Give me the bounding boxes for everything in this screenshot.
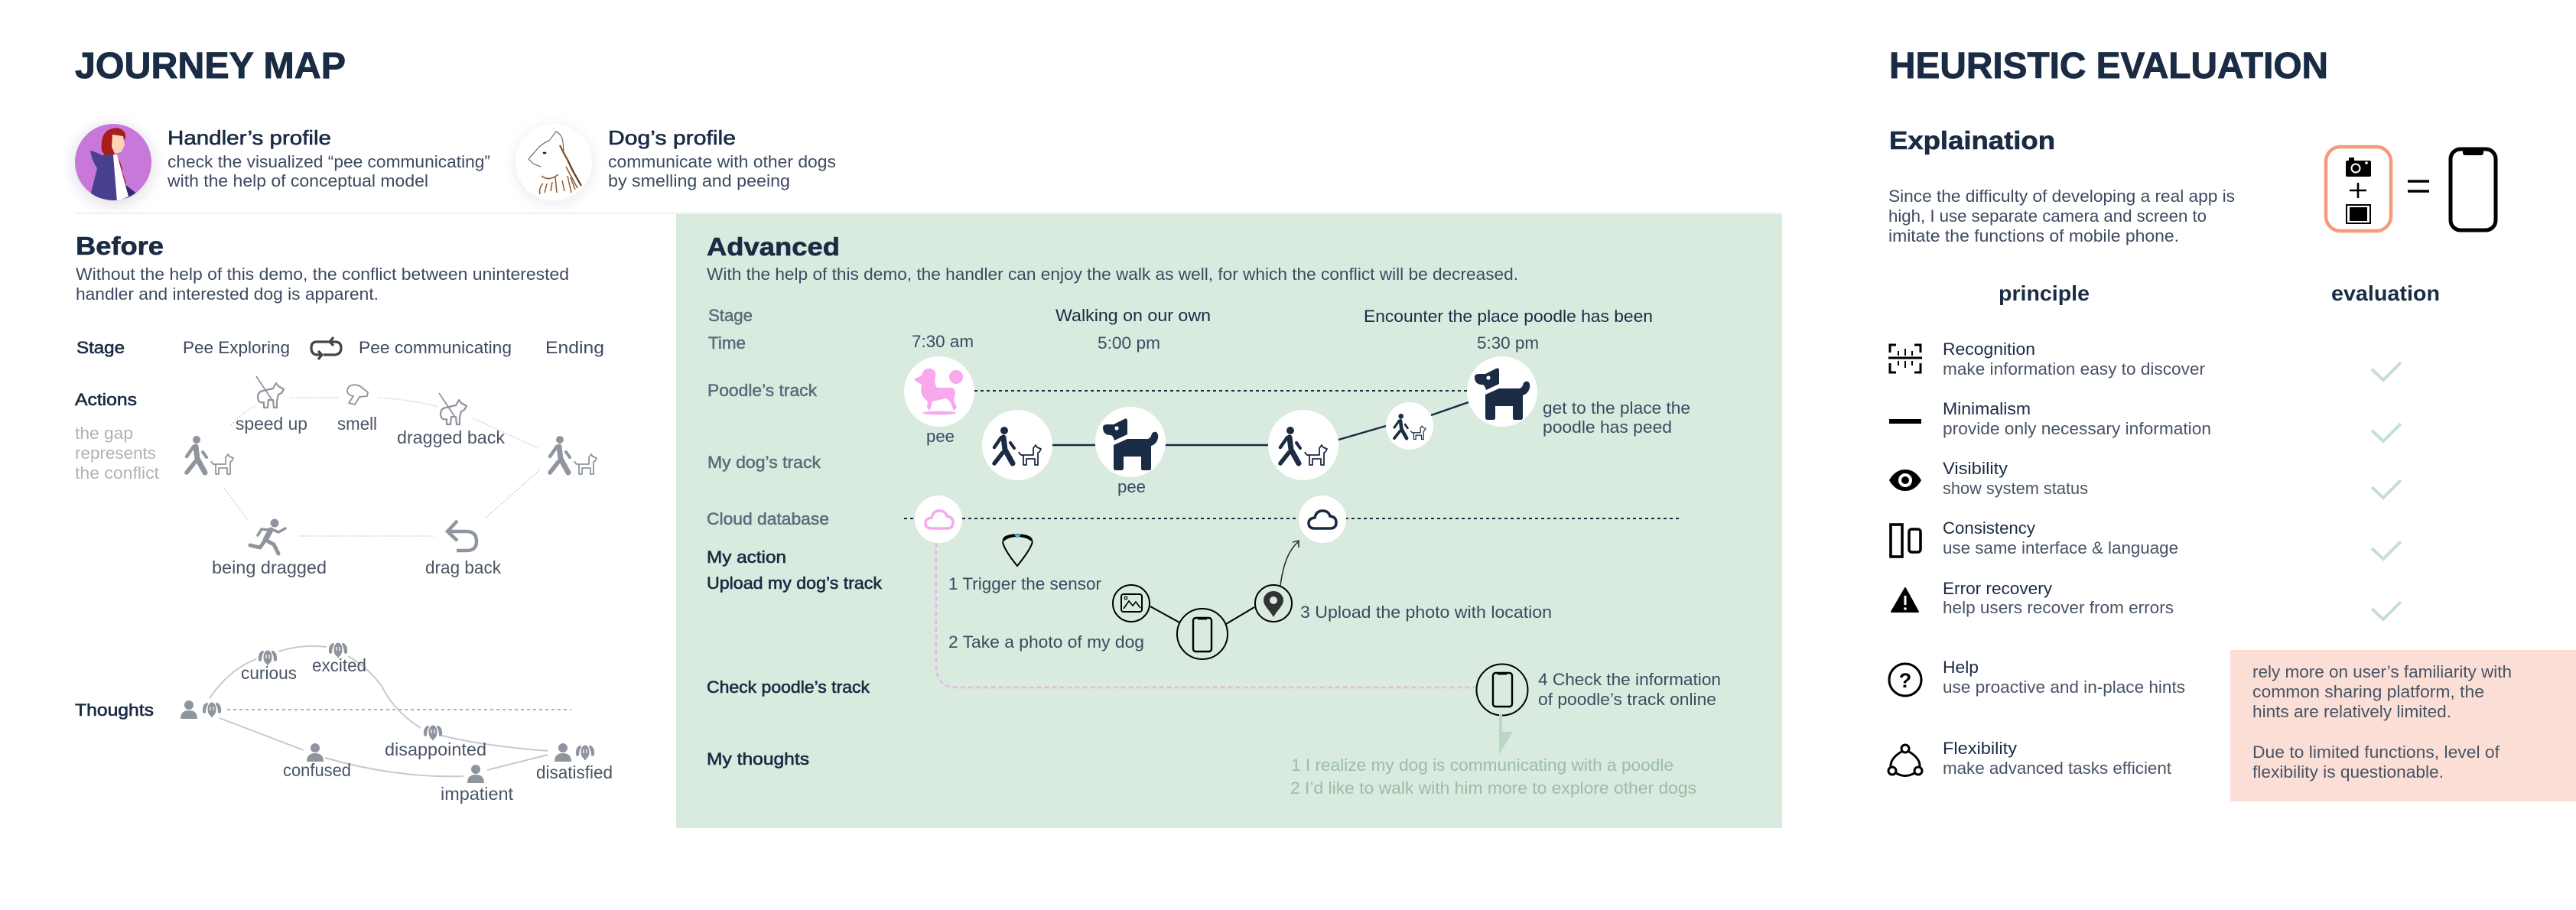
label: speed up: speed up <box>236 414 307 434</box>
icon: consistency <box>1891 525 1921 557</box>
row: recognition <box>1888 340 2401 380</box>
title: journey map: JOURNEY MAP <box>75 46 346 86</box>
text: explanation: Since the difficulty of developing a real app is <box>1888 187 2235 206</box>
icon: handler and dog start <box>187 436 233 474</box>
row: minimalism <box>1889 399 2401 441</box>
panel: advanced <box>676 214 1782 828</box>
node: walking small <box>1386 402 1433 450</box>
text: before description <box>76 265 569 304</box>
text: get to the place <box>1543 398 1690 437</box>
text: minimalism <box>1943 399 2211 438</box>
avatar: handler illustration <box>75 124 151 202</box>
icon: flexibility <box>1888 745 1922 775</box>
node: my dog pee <box>1095 407 1166 477</box>
step 4 text: of poodle’s track online <box>1538 690 1716 709</box>
arrow: to thoughts <box>1499 714 1513 754</box>
row label: time: Time <box>708 333 746 353</box>
text: help note: hints are relatively limited. <box>2252 702 2451 721</box>
label: disappointed: disappointed <box>385 739 486 759</box>
diagram: camera plus screen equals phone <box>2326 147 2496 231</box>
icon: drag back arrow <box>447 521 476 551</box>
note: the gap represents the conflict: the gap <box>75 424 133 443</box>
text: handler description: with the help of conceptual model <box>167 171 428 190</box>
label: excited: excited <box>312 655 366 675</box>
column heading: principle: principle <box>1999 281 2090 305</box>
icon: help: ? <box>1899 669 1911 692</box>
icon: speed up dog <box>256 376 284 408</box>
row label: my dog's track: My dog’s track <box>707 453 821 472</box>
text: flexibility: make advanced tasks efficient <box>1943 759 2171 778</box>
text: dog description: by smelling and peeing <box>608 171 790 190</box>
node: pink cloud <box>915 496 962 543</box>
icon: minimalism <box>1889 419 1921 424</box>
heading: before: Before <box>76 232 164 260</box>
text: error recovery: help users recover from errors <box>1943 598 2174 617</box>
panel background <box>676 214 1782 828</box>
heading: handler's profile: Handler’s profile <box>168 126 331 149</box>
diagram: action loop connectors <box>223 398 539 536</box>
stage: encounter: Encounter the place poodle has been <box>1364 307 1653 326</box>
row: error recovery <box>1891 579 2401 619</box>
text: dog description: communicate with other dogs <box>608 152 836 171</box>
label: pee under my dog: pee <box>1117 477 1146 496</box>
text: consistency: use same interface & language <box>1943 538 2178 557</box>
arrow: upload to cloud <box>1280 541 1299 586</box>
step 4 text <box>1538 670 1721 709</box>
heading: explaination: Explaination <box>1889 126 2055 154</box>
icon: visibility <box>1889 470 1921 491</box>
text: minimalism: Minimalism <box>1943 399 2031 418</box>
icon: dog neutral <box>203 702 221 717</box>
profile: handler <box>75 124 490 202</box>
icon: equals <box>2408 181 2429 191</box>
heading: dog's profile: Dog’s profile <box>608 126 736 149</box>
icon: smell <box>347 385 368 405</box>
time: 5:30 pm: 5:30 pm <box>1477 333 1539 353</box>
icon: dragged back dog <box>439 393 467 424</box>
stage row: Stage <box>76 338 125 357</box>
text: handler description <box>167 152 490 190</box>
my thoughts text <box>1290 756 1696 798</box>
text: flexibility note: flexibility is questionable. <box>2252 762 2444 782</box>
note: the gap represents the conflict: represents <box>75 444 156 463</box>
text: help: Help <box>1943 658 1979 677</box>
check mark <box>2372 424 2401 441</box>
step 1 text: 1 Trigger the sensor <box>948 574 1101 593</box>
row label: my thoughts: My thoughts <box>707 749 809 769</box>
text: help <box>1943 658 2185 697</box>
panel: before <box>75 232 613 804</box>
text: get to the place: get to the place the <box>1543 398 1690 418</box>
node: navy cloud <box>1299 496 1346 543</box>
text: recognition: make information easy to discover <box>1943 359 2205 379</box>
text: error recovery <box>1943 579 2174 617</box>
icon: phone <box>2451 149 2496 230</box>
label: dragged back: dragged back <box>397 427 505 447</box>
stage row <box>76 337 604 359</box>
icon: excited dog <box>329 642 347 658</box>
stage: walking on our own: Walking on our own <box>1055 306 1211 325</box>
text: help: use proactive and in-place hints <box>1943 678 2185 697</box>
icon: disappointed dog <box>424 725 442 740</box>
heading: advanced: Advanced <box>707 232 840 261</box>
title: heuristic evaluation: HEURISTIC EVALUATION <box>1889 46 2328 86</box>
row label: check poodle's track: Check poodle’s track <box>707 678 870 697</box>
icon: handler and dog end <box>550 436 597 474</box>
label: impatient: impatient <box>441 784 514 804</box>
icon: curious dog <box>259 650 277 665</box>
row: flexibility <box>1888 739 2171 778</box>
text: flexibility <box>1943 739 2171 778</box>
column heading: evaluation: evaluation <box>2331 281 2440 305</box>
step 3 text: 3 Upload the photo with location <box>1300 603 1552 622</box>
text: help note <box>2252 662 2512 721</box>
text: explanation: imitate the functions of mobile phone. <box>1888 226 2179 245</box>
row label: cloud database: Cloud database <box>707 509 829 528</box>
profile: dog <box>516 124 836 200</box>
row label: my action: My action <box>707 548 786 567</box>
my thoughts text: 1 I realize my dog is communicating with a poodle <box>1291 756 1673 775</box>
step links <box>1150 606 1254 624</box>
text: help note: common sharing platform, the <box>2252 682 2484 701</box>
text: explanation <box>1888 187 2235 245</box>
text: recognition <box>1943 340 2205 379</box>
node: location pin <box>1255 585 1292 622</box>
text: recognition: Recognition <box>1943 340 2035 359</box>
check mark <box>2372 480 2401 498</box>
text: consistency <box>1943 518 2178 557</box>
check mark <box>2372 362 2401 380</box>
node: phone <box>1177 609 1228 659</box>
label: drag back: drag back <box>425 557 501 577</box>
text: handler description: check the visualized “pee communicating” <box>168 152 490 171</box>
label: curious: curious <box>241 663 297 683</box>
node: photo <box>1113 585 1150 622</box>
text: before description: Without the help of this demo, the conflict between uninterested <box>76 265 569 284</box>
step 4 text: 4 Check the information <box>1538 670 1721 689</box>
text: flexibility note: Due to limited functions, level of <box>2252 743 2500 762</box>
note: the gap represents the conflict <box>75 424 159 483</box>
node: check phone <box>1476 664 1528 716</box>
label: confused: confused <box>283 760 351 780</box>
node: encounter dog <box>1467 356 1537 427</box>
avatar: dog sketch <box>516 124 592 200</box>
text: explanation: high, I use separate camera and screen to <box>1888 206 2207 226</box>
row label: upload my dog's track: Upload my dog’s track <box>707 574 883 593</box>
text: visibility: show system status <box>1943 479 2088 498</box>
text: help note: rely more on user’s familiarity with <box>2252 662 2512 681</box>
text: error recovery: Error recovery <box>1943 579 2052 598</box>
text: advanced description: With the help of this demo, the handler can enjoy the walk as well, for which the conflict will be decreased. <box>707 265 1518 284</box>
icon: sensor <box>1003 534 1033 566</box>
row: visibility <box>1889 459 2401 498</box>
icon: error recovery <box>1891 588 1918 612</box>
icon: person neutral <box>181 700 197 719</box>
text: visibility: Visibility <box>1943 459 2008 478</box>
label: thoughts: Thoughts <box>75 700 154 720</box>
stage row: Pee communicating <box>359 338 512 357</box>
note: the gap represents the conflict: the conflict <box>75 463 159 483</box>
time: 7:30 am: 7:30 am <box>912 332 974 351</box>
label: pee under poodle: pee <box>926 427 955 446</box>
label: actions: Actions <box>75 390 137 409</box>
connector: pink dashed path to check <box>936 543 1475 687</box>
node: walking 5:00 pm <box>982 410 1052 480</box>
check mark <box>2372 602 2401 619</box>
icon: running <box>250 518 285 554</box>
icon: recognition <box>1888 345 1922 372</box>
label: smell: smell <box>337 414 377 434</box>
text: visibility <box>1943 459 2088 498</box>
step 2 text: 2 Take a photo of my dog <box>948 632 1144 652</box>
time: 5:00 pm: 5:00 pm <box>1098 333 1160 353</box>
my thoughts text: 2 I’d like to walk with him more to explore other dogs <box>1290 778 1696 798</box>
icon: disatisfied person <box>555 743 571 762</box>
icon: confused person <box>307 743 324 762</box>
row label: stage: Stage <box>708 306 753 325</box>
text: dog description <box>608 152 836 190</box>
node: poodle pee <box>904 356 974 427</box>
track connector lines <box>904 391 1679 518</box>
stage row: Pee Exploring <box>183 338 290 357</box>
text: consistency: Consistency <box>1943 518 2035 538</box>
text: flexibility: Flexibility <box>1943 739 2017 758</box>
icon: help <box>1889 664 1921 696</box>
icon: impatient person <box>467 765 484 783</box>
row label: poodle's track: Poodle’s track <box>707 381 818 400</box>
check mark <box>2372 541 2401 559</box>
icon: camera plus screen box <box>2326 147 2391 231</box>
stage row: Ending <box>545 338 604 357</box>
text: minimalism: provide only necessary information <box>1943 419 2211 438</box>
label: disatisfied: disatisfied <box>536 762 613 782</box>
chart: thoughts curves <box>210 646 571 776</box>
node: walking later <box>1268 410 1338 480</box>
row: help <box>1889 658 2185 697</box>
panel: evaluation note <box>2230 650 2576 801</box>
text: before description: handler and interested dog is apparent. <box>76 284 379 304</box>
icon: disatisfied dog <box>576 745 594 760</box>
row: consistency <box>1891 518 2401 559</box>
text: get to the place: poodle has peed <box>1543 418 1672 437</box>
label: being dragged: being dragged <box>212 557 327 577</box>
text: flexibility note <box>2252 743 2500 782</box>
